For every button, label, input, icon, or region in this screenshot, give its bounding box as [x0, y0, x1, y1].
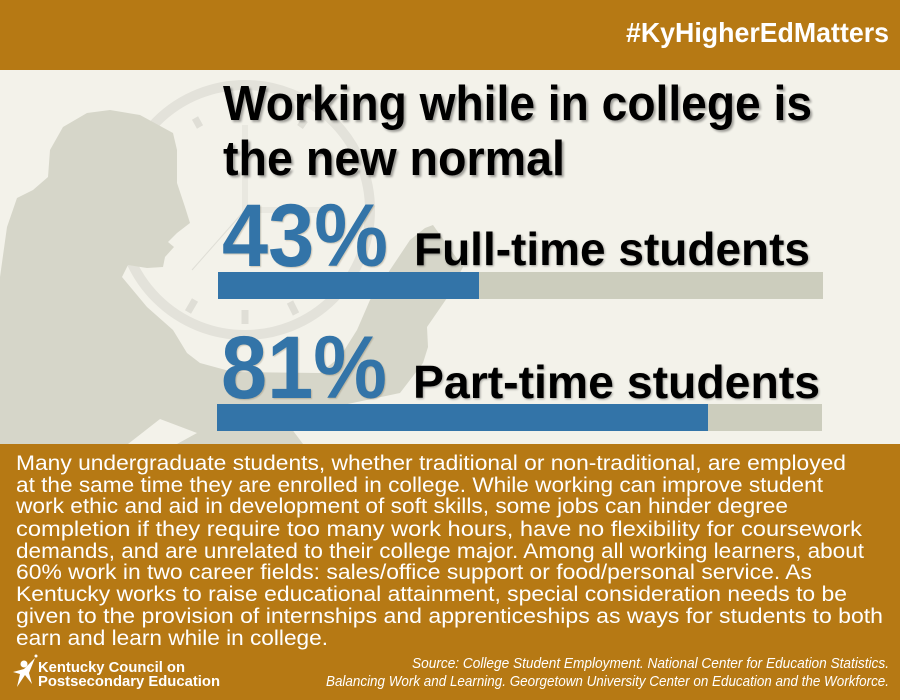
- bottom band: [0, 444, 900, 700]
- percentage 81%: 81%: [221, 317, 387, 417]
- label part-time students: Part-time students: [413, 356, 820, 408]
- title: [223, 77, 812, 186]
- body text: demands, and are unrelated to their college major. Among all working learners, about: [16, 539, 864, 563]
- source citation: [326, 655, 889, 690]
- body text: earn and learn while in college.: [16, 626, 328, 650]
- body text: completion if they require too many work hours, have no flexibility for coursework: [16, 517, 862, 541]
- icon: leaping figure: [13, 654, 38, 687]
- stat: full-time students: [218, 185, 823, 299]
- logo: Kentucky Council on Postsecondary Education: [13, 654, 220, 690]
- logo wordmark: [38, 660, 220, 690]
- logo wordmark: Postsecondary Education: [38, 674, 220, 690]
- body text: given to the provision of internships and apprenticeships as ways for students to both: [16, 604, 883, 628]
- title: the new normal: [223, 132, 565, 186]
- body text: 60% work in two career fields: sales/office support or food/personal service. As: [16, 560, 812, 584]
- bar track: [218, 272, 823, 299]
- bar value 43 percent: [218, 272, 479, 299]
- central panel background: [0, 70, 900, 444]
- body text: [15, 451, 883, 650]
- title: Working while in college is: [223, 77, 812, 131]
- icon: clock background: [120, 85, 370, 335]
- bar value 81 percent: [217, 404, 708, 431]
- label full-time students: Full-time students: [414, 223, 810, 275]
- stat: part-time students: [217, 317, 822, 431]
- top band: [0, 0, 900, 70]
- hashtag: #KyHigherEdMatters: [626, 17, 889, 48]
- logo wordmark: Kentucky Council on: [38, 660, 185, 676]
- body text: work ethic and aid in development of soft skills, some jobs can hinder degree: [15, 494, 788, 518]
- icon: silhouette of student reading: [0, 110, 463, 444]
- body text: at the same time they are enrolled in college. While working can improve student: [16, 473, 823, 497]
- bar track: [217, 404, 822, 431]
- body text: Many undergraduate students, whether traditional or non-traditional, are employed: [16, 451, 846, 475]
- body text: Kentucky works to raise educational attainment, special consideration needs to be: [16, 582, 847, 606]
- percentage 43%: 43%: [222, 185, 388, 285]
